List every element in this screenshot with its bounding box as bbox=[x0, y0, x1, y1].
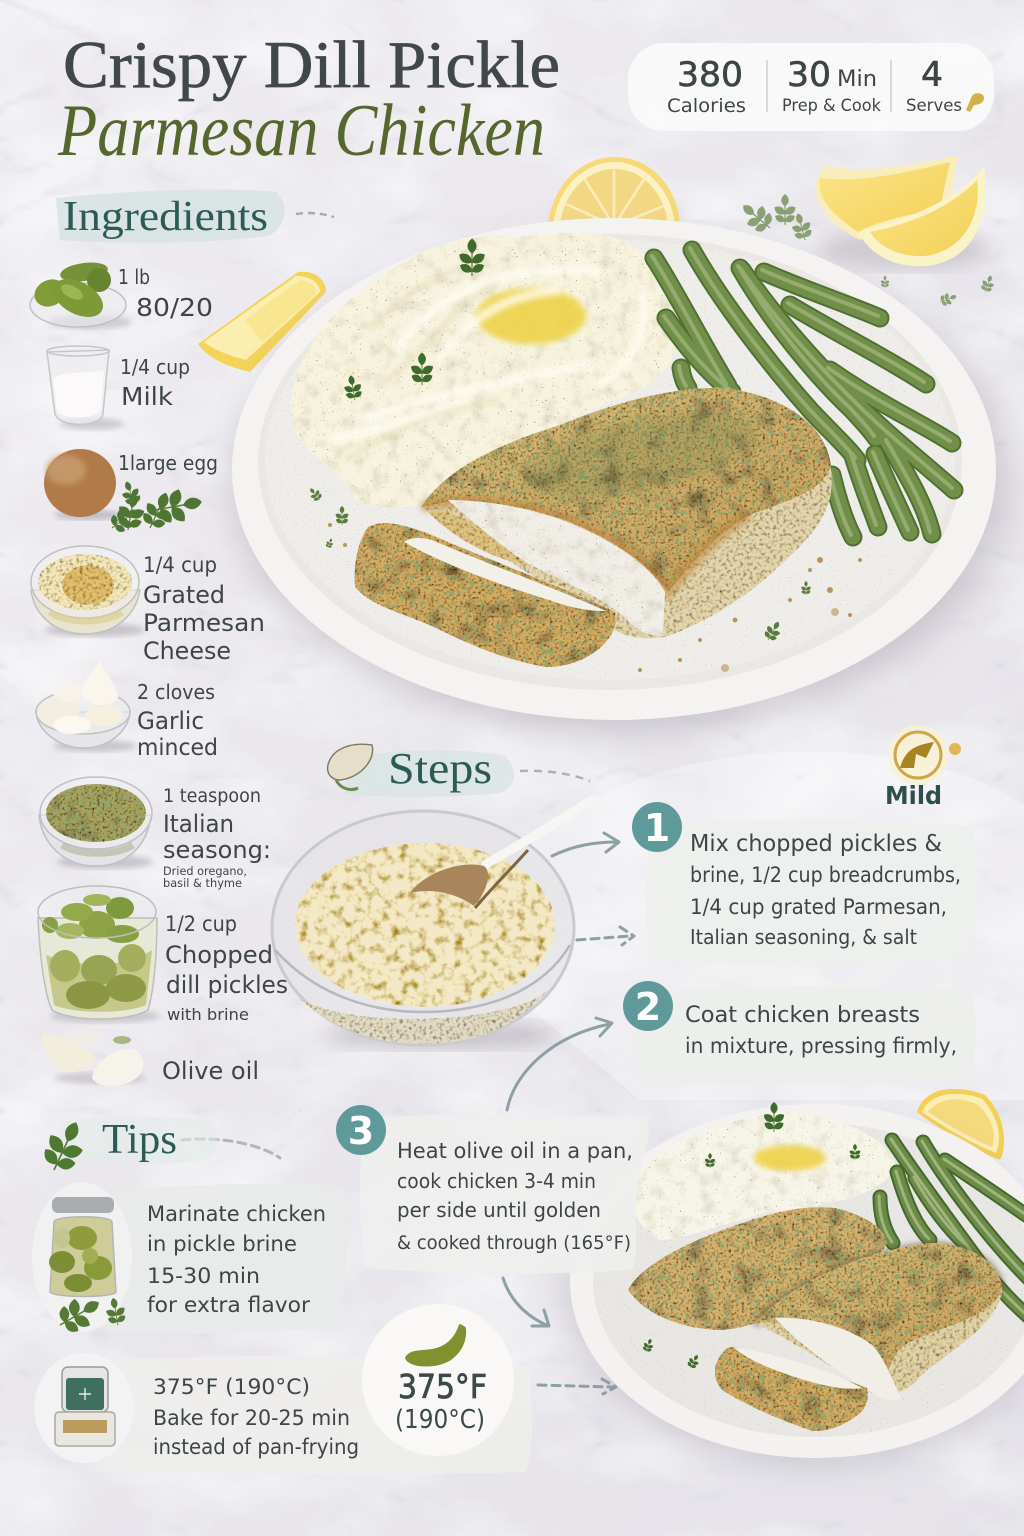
steps background sweep bbox=[520, 752, 1024, 1100]
ingredients heading bbox=[56, 190, 334, 243]
arrows between steps bbox=[182, 833, 634, 1394]
step 3 card: Heat olive oil in a pan, bbox=[397, 1139, 633, 1163]
chicken right bbox=[755, 1243, 1002, 1400]
ingredients list: Italian bbox=[163, 810, 234, 838]
ingredients list: 1 teaspoon bbox=[163, 785, 261, 807]
icon: mushroom bbox=[328, 744, 373, 790]
italian seasoning bowl icon bbox=[39, 777, 153, 869]
ingredients list bbox=[118, 265, 288, 1085]
step 1 card: brine, 1/2 cup breadcrumbs, bbox=[690, 863, 961, 887]
tips heading bbox=[35, 1113, 218, 1179]
title: Parmesan Chicken bbox=[57, 90, 545, 172]
ingredients list: seasong: bbox=[163, 836, 271, 864]
temperature badge: 375°F bbox=[398, 1367, 487, 1406]
icon: gold leaf bbox=[966, 93, 984, 112]
tip 1 card: Marinate chicken bbox=[147, 1202, 326, 1226]
ingredients list: 80/20 bbox=[136, 293, 213, 322]
mild spice badge bbox=[885, 725, 961, 810]
steps heading: Steps bbox=[388, 744, 492, 793]
stats pill: 30 bbox=[787, 55, 831, 95]
chicken slice bbox=[355, 523, 616, 667]
oven icon bbox=[34, 1353, 134, 1463]
stats pill: Prep & Cook bbox=[782, 96, 881, 116]
mashed potatoes bbox=[291, 233, 677, 508]
step 1 card: Mix chopped pickles & bbox=[690, 831, 942, 857]
stats pill: Min bbox=[837, 67, 877, 92]
stats pill: Calories bbox=[667, 95, 746, 117]
step 2 card: Coat chicken breasts bbox=[685, 1003, 920, 1028]
main plate bbox=[232, 218, 1008, 733]
ingredients heading: Ingredients bbox=[63, 194, 268, 240]
ingredients list: Cheese bbox=[143, 637, 231, 665]
temperature badge: (190°C) bbox=[395, 1405, 485, 1435]
second plate bbox=[570, 1102, 1024, 1465]
ingredients list: 1large egg bbox=[118, 451, 218, 475]
step 2 card bbox=[623, 981, 976, 1085]
pickle jar icon bbox=[32, 1182, 132, 1341]
ingredients list: minced bbox=[137, 735, 218, 761]
ingredients list: 1/4 cup bbox=[120, 355, 190, 379]
tip 2 card bbox=[34, 1304, 532, 1475]
step 1 card: 1/4 cup grated Parmesan, bbox=[690, 895, 947, 919]
stats pill: Serves bbox=[906, 96, 962, 116]
tip 1 card: in pickle brine bbox=[147, 1232, 297, 1256]
ingredients list: dill pickles bbox=[166, 971, 288, 999]
ingredients list: Grated bbox=[143, 581, 225, 609]
milk glass icon bbox=[47, 346, 124, 430]
title bbox=[57, 28, 560, 172]
chicken breast main bbox=[421, 388, 832, 638]
crumbs and herbs on plate bbox=[306, 485, 862, 672]
ingredients list: 1/2 cup bbox=[165, 912, 237, 936]
number badge 3 bbox=[336, 1105, 386, 1155]
step 3 card: per side until golden bbox=[397, 1198, 601, 1222]
chopped pickles glass icon bbox=[38, 886, 160, 1023]
step 2 card: in mixture, pressing firmly, bbox=[685, 1034, 957, 1058]
garlic cloves icon bbox=[42, 1029, 146, 1086]
step 3 card bbox=[336, 1105, 649, 1274]
lemon half top bbox=[548, 157, 684, 229]
number badge 1 bbox=[632, 802, 682, 852]
ingredients list: Dried oregano, bbox=[163, 864, 247, 878]
chicken left bbox=[628, 1207, 887, 1330]
stats pill: 4 bbox=[921, 55, 943, 95]
ingredients list: 2 cloves bbox=[137, 680, 215, 704]
temperature badge bbox=[362, 1304, 514, 1456]
parsley garnish bbox=[341, 238, 487, 402]
herb sprig top right bbox=[734, 194, 998, 309]
tip 2 card: Bake for 20-25 min bbox=[153, 1406, 350, 1430]
green beans bbox=[879, 1139, 1024, 1318]
step 1 card bbox=[632, 802, 978, 965]
number badge 3: 3 bbox=[348, 1109, 374, 1153]
green beans bbox=[652, 248, 954, 537]
garnish bbox=[641, 1102, 861, 1371]
mashed potatoes bbox=[633, 1113, 895, 1240]
icon: herb bbox=[35, 1113, 95, 1179]
mild spice badge: Mild bbox=[885, 781, 942, 810]
number badge 2: 2 bbox=[635, 985, 661, 1029]
tip 2 card: instead of pan-frying bbox=[153, 1435, 359, 1459]
number badge 2 bbox=[623, 981, 673, 1031]
ingredients list: Olive oil bbox=[162, 1057, 259, 1085]
ingredients list: Chopped bbox=[165, 941, 273, 969]
title: Crispy Dill Pickle bbox=[63, 28, 560, 102]
lemon wedge left bbox=[198, 272, 326, 372]
stats pill: 380 bbox=[677, 55, 743, 95]
ingredients list: 1/4 cup bbox=[143, 553, 217, 577]
ingredients list: Milk bbox=[121, 382, 174, 411]
second plate lemon slice bbox=[917, 1089, 1004, 1160]
tip 2 card: 375°F (190°C) bbox=[153, 1375, 310, 1399]
tip 1 card: for extra flavor bbox=[147, 1293, 310, 1317]
pickle bowl icon bbox=[30, 260, 132, 329]
stats pill bbox=[628, 43, 994, 131]
mixing bowl bbox=[272, 800, 592, 1049]
ingredients list: basil & thyme bbox=[163, 876, 242, 890]
steps heading bbox=[328, 744, 590, 797]
tip 1 card: 15-30 min bbox=[147, 1264, 260, 1288]
ingredients list: Parmesan bbox=[143, 609, 265, 637]
spoon bbox=[410, 800, 592, 908]
garlic bowl icon bbox=[36, 660, 137, 752]
lemon wedges top right bbox=[816, 155, 990, 270]
egg and herb icon bbox=[44, 449, 205, 538]
parmesan bowl icon bbox=[31, 546, 145, 637]
ingredients list: 1 lb bbox=[118, 265, 150, 289]
ingredients list: with brine bbox=[167, 1005, 249, 1024]
step 3 card: cook chicken 3-4 min bbox=[397, 1169, 596, 1193]
step 1 card: Italian seasoning, & salt bbox=[690, 925, 917, 949]
number badge 1: 1 bbox=[644, 806, 670, 850]
chicken slice bbox=[715, 1347, 868, 1431]
ingredients list: Garlic bbox=[137, 707, 204, 735]
step 3 card: & cooked through (165°F) bbox=[397, 1232, 631, 1254]
tip 1 card bbox=[32, 1182, 347, 1341]
tips heading: Tips bbox=[102, 1117, 177, 1163]
